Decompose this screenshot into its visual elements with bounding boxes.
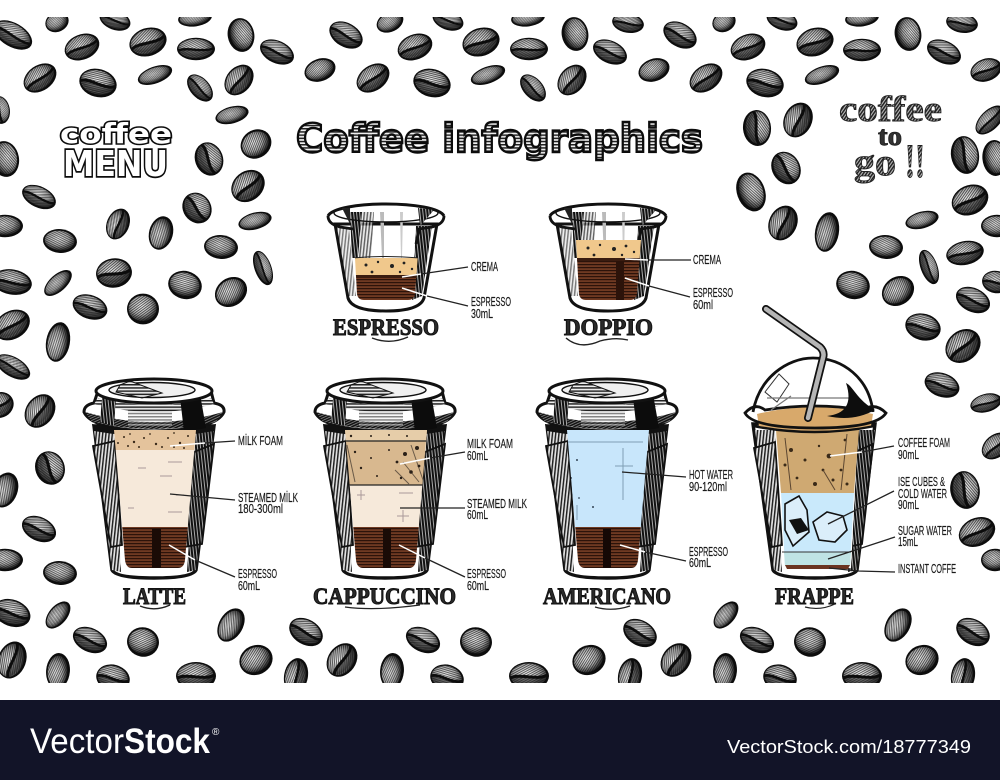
name: americano: AMERICANO <box>543 584 671 609</box>
dome shadow <box>827 383 875 418</box>
label: espresso: 60mL <box>689 556 711 570</box>
title: Coffee infographics <box>296 117 703 162</box>
label: espresso: ESPRESSO <box>238 567 277 581</box>
espresso glass <box>328 204 444 311</box>
heading: coffee menu <box>60 117 172 185</box>
heading: coffee menu: coffee <box>60 117 172 150</box>
heading: coffee to go <box>839 89 942 188</box>
coffee beans: bottom band <box>0 598 990 683</box>
panel: frappe <box>745 309 956 609</box>
footer image id: VectorStock.com/18777349 <box>727 736 971 757</box>
heading: coffee to go: to <box>878 121 902 151</box>
connector: steamed milk <box>400 507 465 509</box>
connector: hot water <box>622 472 686 477</box>
rim band of coffee <box>757 407 873 431</box>
label: ice cubes and cold water: ISE CUBES & <box>898 475 945 489</box>
heading: coffee to go: !! <box>905 135 925 188</box>
cappuccino cup <box>315 379 455 578</box>
connector: ice cubes <box>828 491 894 524</box>
label: ice cubes and cold water: 90mL <box>898 498 919 512</box>
connector: milk foam outer <box>205 441 235 443</box>
label: espresso: 60mL <box>467 579 489 593</box>
coffee beans: top band <box>0 17 1000 102</box>
footer bar <box>0 700 1000 780</box>
panel: espresso <box>328 204 511 341</box>
label: milk foam <box>467 437 513 463</box>
ice and water <box>781 493 854 566</box>
name: espresso: ESPRESSO <box>333 315 439 340</box>
label: espresso <box>467 567 506 593</box>
connector: espresso outer <box>195 560 235 577</box>
bottom sugar water <box>784 552 851 566</box>
heading: coffee to go: coffee <box>839 89 942 129</box>
connector: steamed milk <box>170 494 235 500</box>
connector: espresso <box>169 545 195 560</box>
label: espresso amount: 30mL <box>471 307 493 321</box>
americano cup <box>537 379 677 578</box>
name: doppio: DOPPIO <box>564 315 653 340</box>
connector: milk foam outer <box>430 452 465 458</box>
label: ice cubes and cold water: COLD WATER <box>898 487 947 501</box>
footer logo bold part: ® <box>212 727 220 738</box>
dome lid <box>753 358 873 412</box>
connector: crema <box>625 259 648 260</box>
label: steamed milk: 180-300ml <box>238 502 283 516</box>
connector: espresso <box>625 278 649 286</box>
panel: doppio <box>550 204 733 345</box>
connector: espresso outer <box>645 552 686 561</box>
connector: coffee foam <box>830 452 862 456</box>
label: milk foam: MILK FOAM <box>467 437 513 451</box>
label: steamed milk: STEAMED MILK <box>467 497 527 511</box>
label: hot water: 90-120ml <box>689 480 727 494</box>
label: espresso <box>689 545 728 570</box>
label: coffee foam: 90mL <box>898 448 919 462</box>
label: espresso amount: ESPRESSO <box>471 295 511 309</box>
label: espresso: 60mL <box>238 579 260 593</box>
connector: crema outer <box>648 259 691 261</box>
ice cubes <box>785 496 847 546</box>
label: crema: CREMA <box>471 260 498 274</box>
footer logo: Vector <box>30 722 124 761</box>
coffee beans: left cluster <box>0 95 277 586</box>
label: sugar water: SUGAR WATER <box>898 524 952 538</box>
label: steamed milk: 60mL <box>467 508 488 522</box>
label: espresso amount: ESPRESSO <box>693 286 733 300</box>
label: instant coffee: INSTANT COFFE <box>898 562 956 576</box>
label: espresso: ESPRESSO <box>467 567 506 581</box>
connector: milk foam <box>400 458 430 464</box>
label: espresso amount: 60ml <box>693 298 713 312</box>
panel: cappuccino <box>313 379 527 609</box>
connector: milk foam <box>170 443 205 446</box>
label: steamed milk <box>238 491 298 516</box>
label: steamed milk <box>467 497 527 522</box>
cup body <box>753 424 875 578</box>
label: espresso <box>238 567 277 593</box>
label: hot water <box>689 468 733 494</box>
coffee foam <box>776 430 859 493</box>
footer logo bold part: Stock <box>124 722 210 761</box>
label: milk foam: 60mL <box>467 449 488 463</box>
connector: espresso <box>399 545 425 558</box>
connector: espresso <box>620 545 645 552</box>
connector: espresso <box>402 288 427 296</box>
coffee beans: right cluster <box>731 98 1000 571</box>
label: milk foam: MİLK FOAM <box>238 434 283 448</box>
connector: crema outer <box>421 267 468 274</box>
label: coffee foam <box>898 436 950 462</box>
heading: coffee to go: go <box>854 142 896 184</box>
name: cappuccino: CAPPUCCINO <box>313 584 456 609</box>
label: coffee foam: COFFEE FOAM <box>898 436 950 450</box>
panel: americano <box>537 379 733 609</box>
label: espresso: ESPRESSO <box>689 545 728 559</box>
frappe cup <box>745 358 886 578</box>
label: espresso amount <box>471 295 511 321</box>
heading: coffee menu: MENU <box>63 144 168 185</box>
label: ice cubes and cold water <box>898 475 947 512</box>
label: sugar water <box>898 524 952 549</box>
latte cup <box>84 379 224 578</box>
connector: espresso outer <box>649 286 690 297</box>
panel: latte <box>84 379 298 609</box>
label: hot water: HOT WATER <box>689 468 733 482</box>
connector: coffee foam outer <box>862 446 894 452</box>
straw <box>766 309 824 418</box>
connector: espresso outer <box>427 296 468 306</box>
connector: espresso outer <box>425 558 465 577</box>
doppio glass <box>550 204 666 311</box>
label: espresso amount <box>693 286 733 312</box>
name: latte: LATTE <box>123 584 186 609</box>
connector: instant coffee <box>829 568 895 572</box>
label: sugar water: 15mL <box>898 535 918 549</box>
label: crema: CREMA <box>693 253 721 267</box>
label: steamed milk: STEAMED MİLK <box>238 491 298 505</box>
connector: crema <box>402 274 421 277</box>
name: frappe: FRAPPE <box>775 584 854 609</box>
connector: sugar water <box>828 537 895 559</box>
